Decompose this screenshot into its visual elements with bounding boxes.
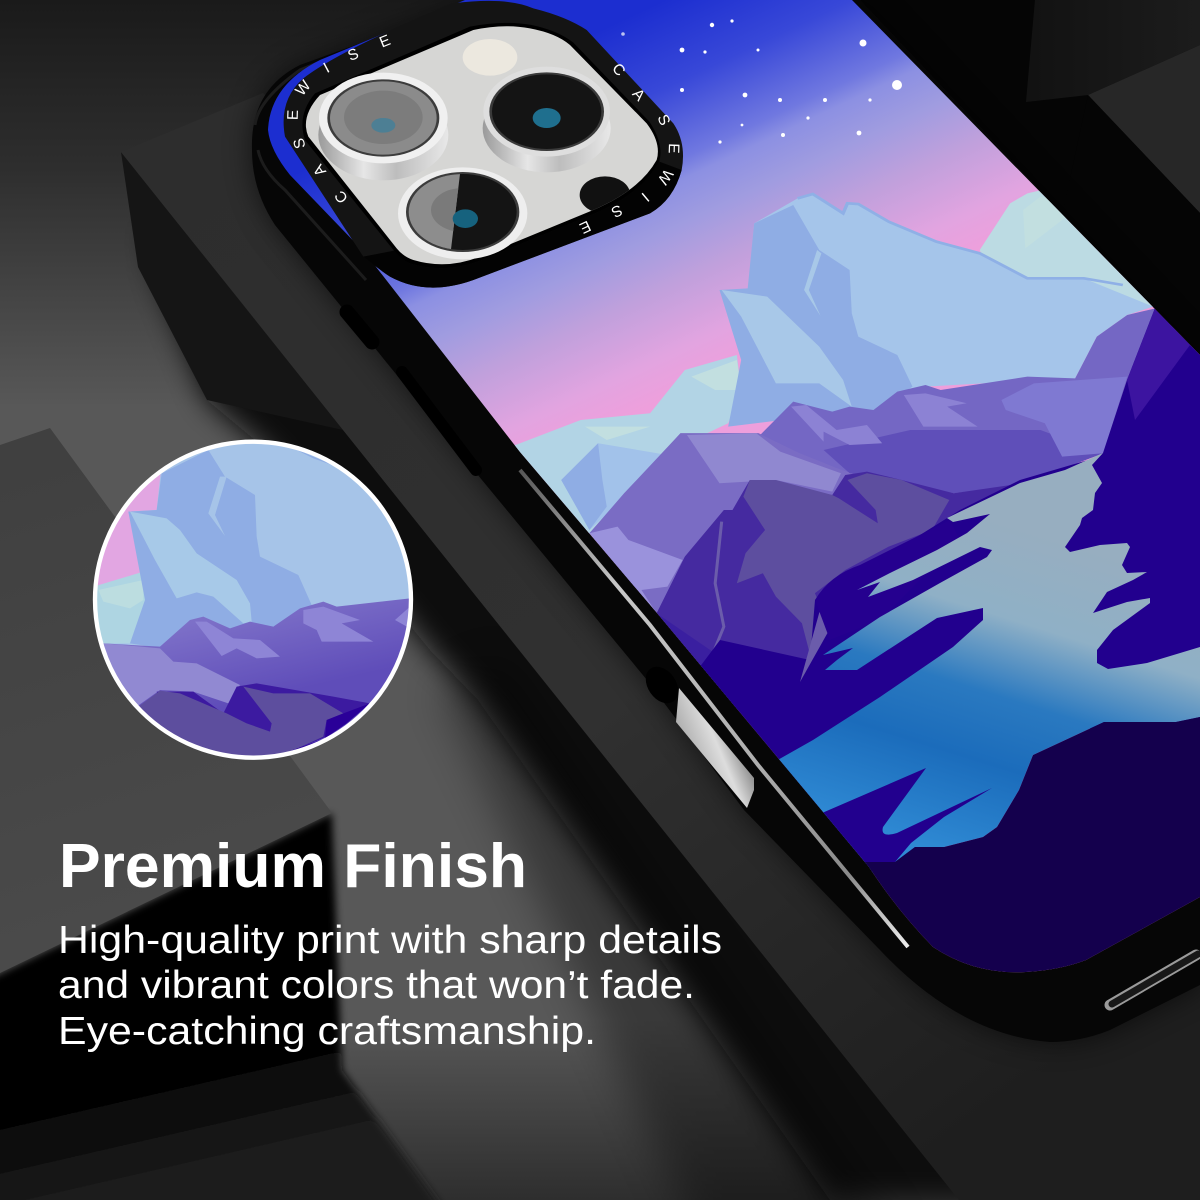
island frame xyxy=(284,1,683,288)
stream line xyxy=(713,522,724,653)
purple range xyxy=(93,598,413,760)
brand text ring: I xyxy=(638,189,652,205)
circle border xyxy=(95,442,411,758)
purple range xyxy=(759,308,1155,493)
main peak shadow xyxy=(720,205,912,427)
navy shoreline lower left xyxy=(701,460,1090,862)
brand text ring: E xyxy=(377,32,393,51)
left mid facet xyxy=(93,643,240,730)
body text: and vibrant colors that won’t fade. xyxy=(58,964,695,1007)
pale highlight xyxy=(98,580,143,608)
lit facet xyxy=(130,512,252,623)
brand text ring: E xyxy=(665,143,682,154)
lens: upper left xyxy=(318,73,448,180)
flash xyxy=(463,39,517,76)
brand text ring: S xyxy=(608,201,625,221)
violet strip on navy shore xyxy=(1127,308,1190,420)
body text: High-quality print with sharp details xyxy=(58,919,722,962)
brand text ring: S xyxy=(345,45,361,65)
brand text ring: I xyxy=(321,60,333,77)
left mid mountain xyxy=(590,433,761,533)
inner ring xyxy=(302,23,660,268)
brand text ring: E xyxy=(285,110,302,120)
purple right facet xyxy=(1001,377,1127,457)
dark foreground mountain xyxy=(860,717,1200,990)
navy fingers in lake xyxy=(824,768,992,872)
brand text ring: A xyxy=(310,160,330,179)
ridge xyxy=(290,447,337,467)
bottom charging port xyxy=(1110,954,1198,1005)
dark rock bulges xyxy=(815,535,920,633)
small blue peak xyxy=(590,444,661,529)
lens: upper right xyxy=(483,67,611,172)
phone case body xyxy=(252,0,1200,1042)
brand text ring: W xyxy=(292,77,315,99)
navy shoreline right xyxy=(1090,308,1200,760)
far right peak xyxy=(980,190,1152,306)
side button: power xyxy=(402,372,476,470)
side port dent xyxy=(639,661,685,709)
brand text ring: W xyxy=(654,166,676,188)
brand text ring: E xyxy=(577,217,593,237)
lower rim shadow xyxy=(363,162,682,288)
navy shadow xyxy=(658,614,738,710)
heading: Premium Finish xyxy=(59,832,527,901)
microphone hole xyxy=(580,176,630,214)
range highlight xyxy=(585,197,1084,440)
dark ridge xyxy=(157,683,370,760)
brand text ring: S xyxy=(654,112,673,128)
dark violet mountain xyxy=(657,472,1023,710)
side button: action switch xyxy=(347,312,372,342)
left far range xyxy=(511,355,741,533)
glass plate xyxy=(306,26,658,264)
body text: Eye-catching craftsmanship. xyxy=(58,1010,596,1053)
phone screen artwork xyxy=(250,0,1200,1000)
navy shore xyxy=(288,703,370,752)
lower left facet xyxy=(589,527,683,613)
main peak xyxy=(755,196,1153,389)
muted ridge drip over navy xyxy=(800,612,828,682)
lit facet left mid xyxy=(687,433,841,492)
sliver xyxy=(208,477,227,536)
main peak ridge line xyxy=(798,194,1123,285)
violet underlay xyxy=(590,433,955,710)
small peak shadow xyxy=(561,443,607,530)
brand text ring xyxy=(285,32,682,237)
lit facet xyxy=(722,290,852,407)
purple facets xyxy=(791,393,978,445)
lake xyxy=(760,453,1200,880)
mountains xyxy=(511,180,1200,710)
body text xyxy=(58,919,722,1053)
pink sky xyxy=(98,474,160,586)
brand text ring: S xyxy=(290,136,310,150)
muted mountain xyxy=(737,473,949,657)
peak shadow xyxy=(128,450,312,648)
lens: bottom xyxy=(398,167,527,259)
purple lower shade xyxy=(824,430,1103,493)
pale far range xyxy=(93,572,145,643)
shadow sliver xyxy=(804,250,821,316)
camera island xyxy=(284,1,683,288)
side button: silver xyxy=(676,688,754,808)
muted mountain xyxy=(138,687,343,763)
brand text ring: C xyxy=(608,60,628,80)
brand text ring: C xyxy=(332,187,352,206)
zoom detail circle xyxy=(90,437,417,763)
stars xyxy=(621,19,902,144)
purple facets xyxy=(195,607,410,658)
sky xyxy=(250,0,1200,1000)
brand text ring: A xyxy=(629,86,649,105)
